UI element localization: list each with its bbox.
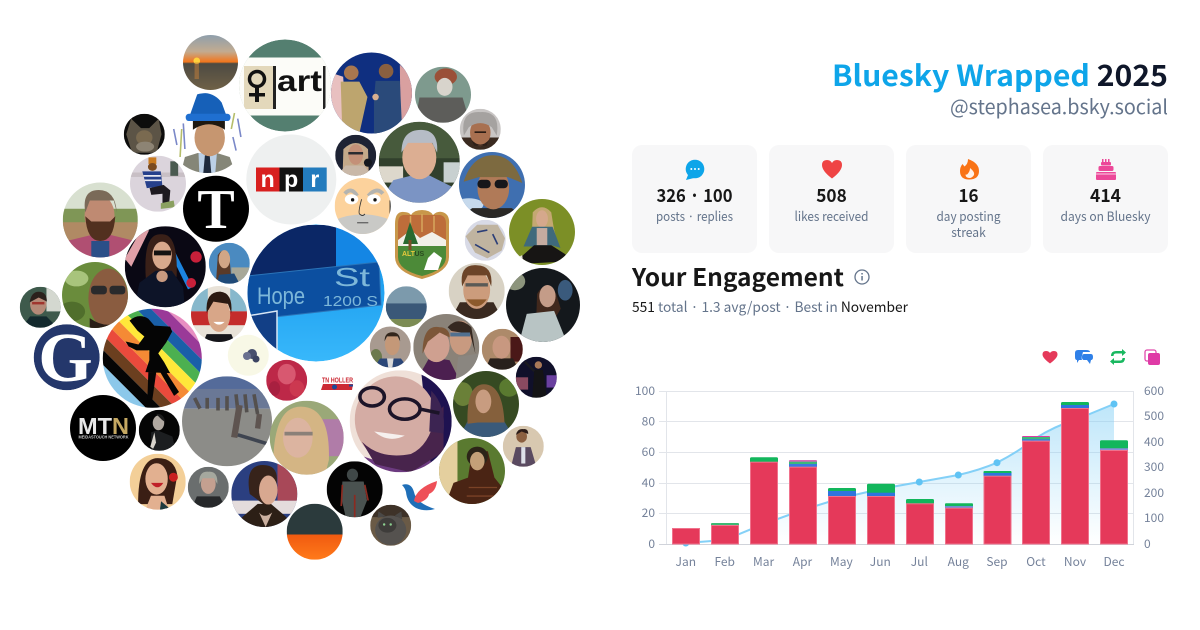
stat card: posts and replies: 326 · 100: [656, 182, 732, 208]
stat card: days on Bluesky: days on Bluesky: [1060, 206, 1151, 225]
avatar: MTN logo: MEIDASTOUCH NETWORK: [78, 434, 129, 440]
avatar: dark armored figure: [327, 461, 383, 517]
icon: heart: [822, 160, 842, 178]
avatar: blue and red bird logo: [402, 481, 437, 510]
grid lines: [659, 391, 1134, 544]
left axis labels: 40: [642, 474, 655, 491]
icon: reposts: [1110, 349, 1126, 365]
left axis labels: 0: [648, 535, 655, 552]
stat card: posts and replies: posts · replies: [656, 206, 733, 225]
avatar: woman with American flag: [231, 461, 297, 527]
avatar: TN Holler logo: TN HOLLER: [322, 376, 353, 384]
avatar: curly haired man: [460, 109, 501, 150]
bar: Jun: [867, 484, 895, 544]
bar: Sep: [984, 471, 1012, 544]
avatar: woman with glasses: [335, 135, 376, 176]
avatar: bald man: [482, 329, 523, 370]
avatar: MTN logo: MT: [78, 413, 112, 439]
stat card: streak: streak: [951, 222, 987, 241]
month labels: Dec: [1103, 553, 1125, 570]
avatar: MTN logo: [70, 395, 136, 461]
month labels: Apr: [793, 553, 813, 570]
avatar: Alt US National Park Service badge: [395, 210, 449, 279]
title: Bluesky Wrapped 2025: [832, 53, 1168, 95]
month labels: Feb: [714, 553, 735, 570]
bar: Oct: [1022, 436, 1050, 544]
avatar: woman in white shirt: [505, 268, 580, 342]
bar: May: [828, 488, 856, 544]
avatar: woman with city background: [209, 243, 250, 284]
avatar: laughing woman with red flower: [130, 454, 186, 510]
stat card: days on Bluesky: 414: [1090, 182, 1121, 208]
avatar: two people shaking hands with flags: [331, 52, 412, 134]
avatar: person sitting in snow: [130, 156, 186, 212]
avatar: rainbow with silhouette of Nancy Drew: [102, 308, 202, 408]
left axis labels: 20: [642, 504, 655, 521]
month labels: Sep: [986, 553, 1008, 570]
avatar: woman with long hair and green foliage: [453, 371, 519, 437]
stat card: posts and replies: [632, 145, 757, 253]
month labels: May: [830, 553, 854, 570]
stacked bars: months: [672, 402, 1128, 544]
avatar: sunset: [183, 35, 238, 90]
avatar: NPR logo: r: [310, 166, 319, 192]
avatar: TN Holler logo: [321, 376, 353, 390]
avatar: New York Times T: [183, 176, 249, 242]
bar: Feb: [711, 523, 739, 544]
avatar: grey haired woman: [188, 467, 229, 508]
avatar: bearded man: [63, 182, 138, 258]
bar: Mar: [750, 457, 778, 544]
avatar bubble cluster: [20, 35, 580, 560]
right axis labels: 600: [1144, 382, 1164, 399]
stat card: streak: 16: [958, 182, 978, 208]
avatar: smiling man with glasses, large: [350, 370, 452, 472]
avatar: Hope St street sign: 1200 S: [323, 293, 378, 310]
avatar: NPR logo: [246, 134, 336, 224]
month labels: Jun: [870, 553, 891, 570]
avatar: beach with wooden pilings: [182, 376, 272, 466]
month labels: Jan: [676, 553, 696, 570]
avatar: man in suit: [370, 326, 411, 368]
left axis labels: [635, 382, 655, 552]
right axis labels: 100: [1144, 509, 1164, 526]
avatar: red flowers: [266, 360, 307, 401]
avatar: blonde older woman: [270, 401, 344, 475]
avatar: George Takei: [379, 122, 460, 203]
avatar: Hope St street sign: [247, 224, 384, 362]
avatar: man on stage: [516, 357, 557, 398]
right axis labels: 200: [1144, 484, 1164, 501]
avatar: woman in red glasses: [20, 287, 61, 328]
left axis labels: 60: [642, 443, 655, 460]
avatar: NPR logo: n: [261, 166, 275, 192]
bar: Nov: [1061, 402, 1089, 544]
cumulative area and line: [682, 400, 1118, 546]
avatar: Q art logo: art: [277, 65, 322, 98]
month labels: Oct: [1026, 553, 1046, 570]
avatar: medieval portrait: [439, 438, 505, 504]
stat card: likes: likes received: [794, 206, 868, 225]
engagement summary: 551 total · 1.3 avg/post · Best in November: [632, 297, 909, 317]
right axis labels: 0: [1144, 535, 1151, 552]
avatar: Guardian G: G: [38, 320, 93, 397]
stat card: days on Bluesky: [1043, 145, 1168, 253]
avatar: Alt US National Park Service badge: ALT: [402, 251, 416, 258]
icon: info: [855, 270, 869, 284]
icon: cake: [1096, 159, 1116, 180]
avatar: statue with red hair: [415, 67, 471, 123]
avatar: NPR logo: p: [284, 166, 298, 192]
icon: quotes: [1145, 350, 1160, 365]
avatar: New York Times T: T: [197, 179, 235, 241]
avatar: cartoon bald man: [335, 178, 391, 234]
avatar: Hope St street sign: St: [334, 262, 371, 292]
handle: @stephasea.bsky.social: [950, 91, 1168, 120]
month labels: Nov: [1064, 553, 1087, 570]
left axis labels: 80: [642, 412, 655, 430]
avatar: blonde woman in field: [509, 199, 575, 265]
avatar: man with hat and sunglasses: [454, 152, 525, 218]
avatar: Rachel Maddow: [191, 286, 247, 342]
right axis labels: 400: [1144, 433, 1164, 450]
avatar: blue flowers on cream: [228, 335, 269, 376]
avatar: man in black and white profile: [139, 410, 180, 451]
avatar: man with glasses and beard: [449, 263, 505, 319]
avatar: Q art logo: [239, 40, 331, 132]
stat card: likes: 508: [816, 182, 847, 208]
avatar: MTN logo: N: [112, 413, 129, 439]
chart legend icons: [1042, 349, 1160, 365]
avatar: cartoon grey cat: [370, 505, 411, 546]
bar: Jan: [672, 528, 700, 544]
stat card: likes: [769, 145, 894, 253]
avatar: Hope St street sign: Hope: [257, 283, 305, 310]
avatar: city skyline: [386, 286, 427, 327]
right axis labels: 500: [1144, 407, 1164, 424]
month labels: Mar: [753, 553, 775, 570]
stat card: streak: day posting: [936, 206, 1001, 225]
icon: chat bubble: [686, 160, 704, 180]
bar: Apr: [789, 460, 817, 544]
right axis labels: [1144, 382, 1164, 552]
avatar: rock: [465, 220, 506, 261]
avatar: couple selfie: [413, 314, 479, 380]
avatar: man with sunglasses outdoors: [59, 262, 128, 328]
avatar: orange horizon: [287, 504, 343, 560]
stat card: streak: [906, 145, 1031, 253]
icon: flame: [960, 159, 979, 180]
bar: Aug: [945, 503, 973, 544]
month labels: [676, 553, 1125, 570]
avatar: Alt US National Park Service badge: US: [414, 251, 425, 258]
bar: Dec: [1100, 440, 1128, 544]
month labels: Aug: [948, 553, 969, 570]
heading: Your Engagement: Your Engagement: [631, 258, 844, 293]
left axis labels: 100: [635, 382, 655, 399]
bar: Jul: [906, 499, 934, 544]
avatar: man in New Year hat: [172, 93, 242, 173]
avatar: TV news woman: [125, 226, 206, 307]
icon: likes heart: [1042, 351, 1058, 364]
avatar: woman with patterned dress: [503, 426, 544, 467]
avatar: tabby cat: [124, 114, 165, 155]
engagement chart: [635, 382, 1164, 570]
right axis labels: 300: [1144, 458, 1164, 475]
month labels: Jul: [911, 553, 928, 570]
icon: replies bubbles: [1075, 350, 1093, 364]
